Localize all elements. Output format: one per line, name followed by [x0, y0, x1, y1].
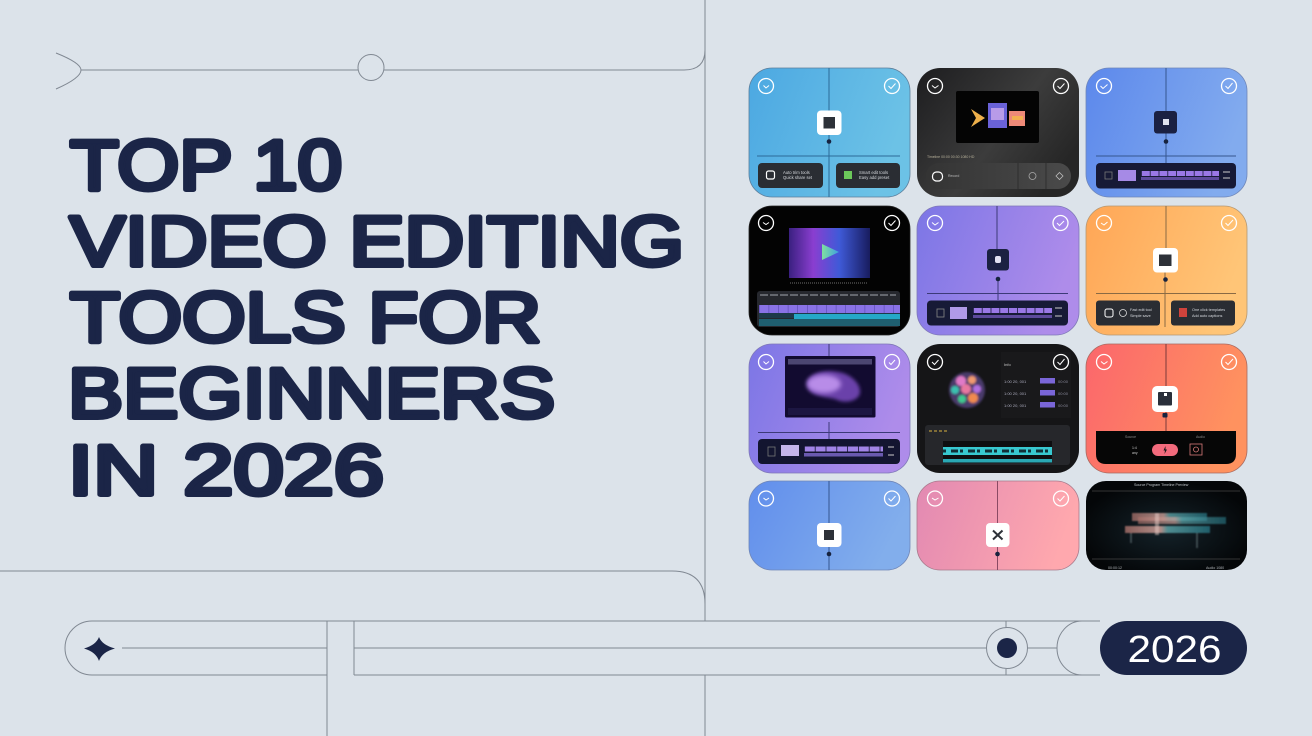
- card 8: dark editor with colour burst: Info: [1004, 362, 1011, 367]
- card 8: dark editor with colour burst: 00:00: [1058, 379, 1069, 384]
- card 8: dark editor with colour burst: 1:00 20, 001: [1004, 403, 1027, 408]
- top connector line: [56, 50, 705, 89]
- card 9: coral: Audio: [1196, 435, 1205, 439]
- title: VIDEO EDITING: [70, 202, 684, 280]
- card 6: orange: Simple save: [1130, 314, 1151, 318]
- frame lines: [0, 0, 705, 736]
- card 5: purple timeline: [917, 206, 1079, 335]
- card 1: sky blue: [749, 68, 910, 197]
- card 7: purple with screen: [749, 344, 910, 473]
- timeline knob: [986, 621, 1028, 675]
- card 12: black streak preview: Source Program Timeline Preview: [1134, 483, 1189, 487]
- card 2: dark player: Timeline 00:00 00:30 1080 HD: [927, 155, 975, 159]
- card 6: orange: One click templates: [1192, 308, 1225, 312]
- year badge: 2026: [1128, 629, 1222, 671]
- card 8: dark editor with colour burst: 1:00 20, 001: [1004, 379, 1027, 384]
- card 1: sky blue: Easy add preset: [859, 175, 890, 180]
- title: TOOLS FOR: [70, 278, 541, 356]
- card 6: orange: Fast edit tool: [1130, 308, 1152, 312]
- card 2: dark player: [917, 68, 1079, 197]
- card 6: orange: [1086, 206, 1247, 335]
- card 1: sky blue: Smart edit tools: [859, 170, 888, 175]
- title: [68, 126, 684, 510]
- year badge: [1100, 621, 1247, 675]
- card 9: coral: any: [1132, 451, 1138, 455]
- card 3: blue timeline: [1086, 68, 1247, 197]
- card 2: dark player: Record: [948, 174, 959, 178]
- card 8: dark editor with colour burst: 1:00 20, 001: [1004, 391, 1027, 396]
- title: BEGINNERS: [68, 354, 555, 432]
- title: IN 2026: [68, 430, 384, 510]
- card 1: sky blue: Quick share set: [783, 175, 813, 180]
- card 4: black editor: [749, 206, 910, 335]
- card 6: orange: Add auto captions: [1192, 314, 1222, 318]
- bottom timeline bar: [65, 621, 1247, 675]
- icon: sparkle: [84, 637, 115, 661]
- card 9: coral: 1:4: [1132, 446, 1137, 450]
- card 8: dark editor with colour burst: 00:00: [1058, 391, 1069, 396]
- title: TOP 10: [70, 126, 342, 204]
- card 12: black streak preview: [1086, 481, 1247, 570]
- card 1: sky blue: Auto trim tools: [783, 170, 810, 175]
- card 8: dark editor with colour burst: 00:00: [1058, 403, 1069, 408]
- card 11: pink, cropped: [917, 481, 1079, 570]
- card 9: coral: Source: [1125, 435, 1136, 439]
- card 12: black streak preview: Audio 1080: [1206, 566, 1224, 570]
- card 8: dark editor with colour burst: [917, 344, 1079, 473]
- card 12: black streak preview: 00:00:12: [1108, 566, 1122, 570]
- card 9: coral: [1086, 344, 1247, 473]
- card 10: blue, cropped: [749, 481, 910, 570]
